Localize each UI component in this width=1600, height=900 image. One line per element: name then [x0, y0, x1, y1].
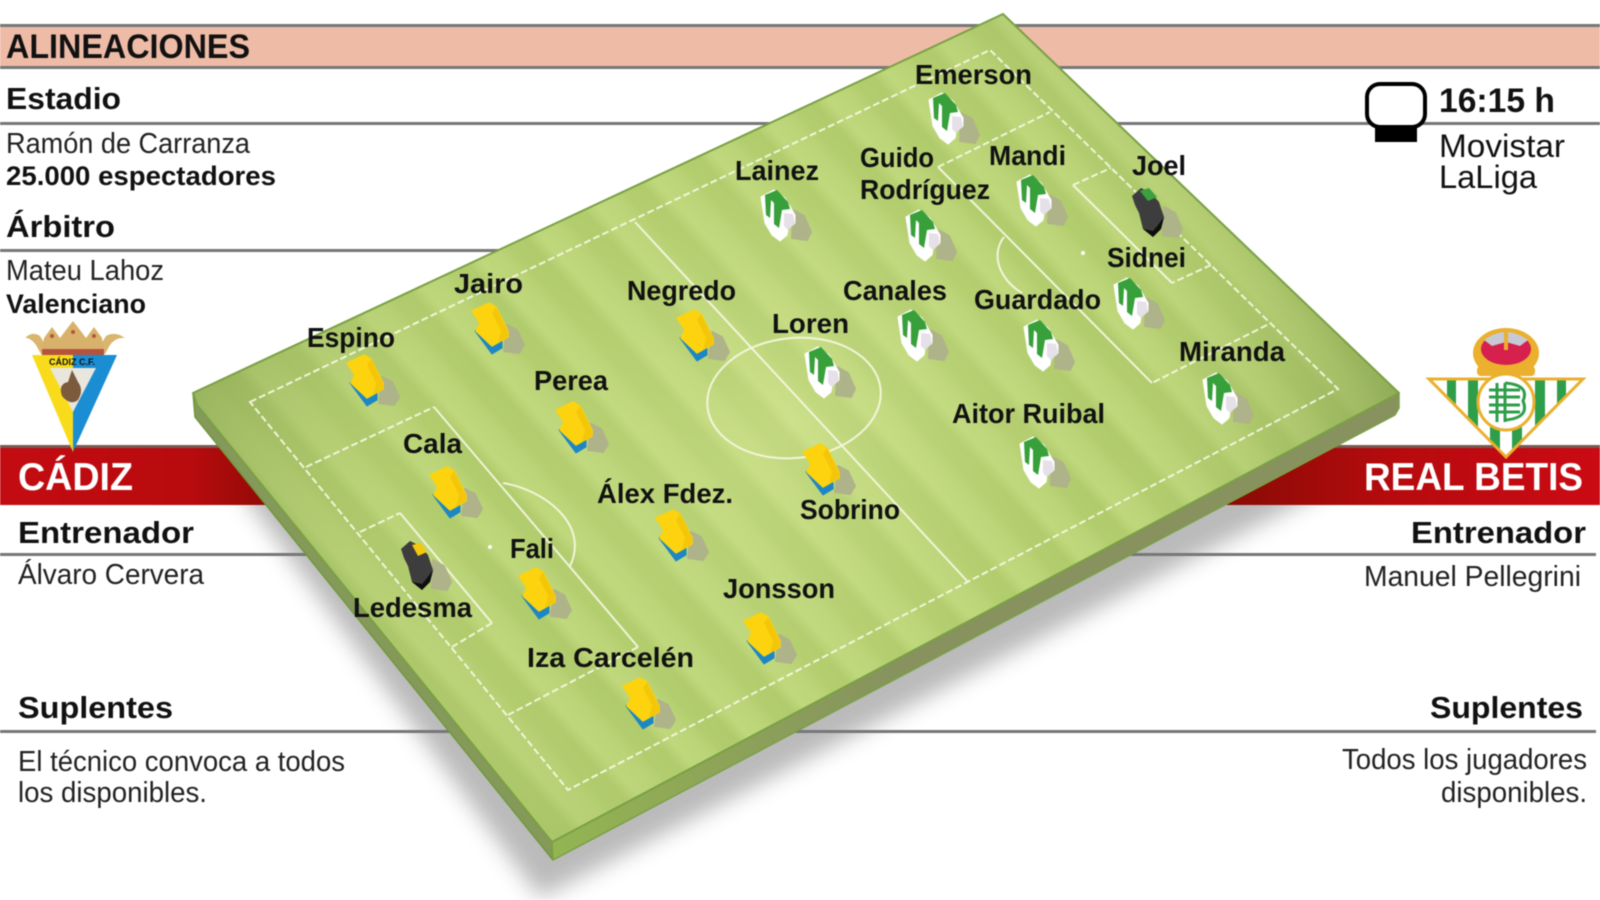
- player: Ledesma: [353, 541, 472, 623]
- player: Jairo: Jairo: [454, 268, 523, 299]
- panel: stadium and referee: Estadio: [6, 81, 121, 116]
- player: Lainez: [735, 155, 819, 241]
- player: Perea: [534, 365, 608, 453]
- player: Sidnei: [1107, 242, 1186, 329]
- player: Aitor Ruibal: [952, 398, 1105, 488]
- player: Aitor Ruibal: Aitor Ruibal: [952, 398, 1105, 429]
- rule: estadio: [0, 122, 1600, 125]
- player: Guardado: Guardado: [974, 284, 1101, 315]
- panel: betis notes: disponibles.: [1441, 777, 1587, 809]
- panel: broadcast: Movistar: [1439, 128, 1565, 164]
- panel: stadium and referee: Mateu Lahoz: [6, 255, 164, 287]
- player: Sidnei: Sidnei: [1107, 242, 1186, 273]
- player: Guido Rodriguez: Guido: [860, 142, 934, 173]
- panel: stadium and referee: 25.000 espectadores: [6, 161, 276, 191]
- panel: broadcast: LaLiga: [1439, 159, 1537, 195]
- icon: cadiz crest: [25, 321, 125, 452]
- player: Alex Fdez: [597, 478, 733, 561]
- pitch markings: [250, 50, 1338, 790]
- title band: [0, 24, 1600, 69]
- panel: cadiz notes: Álvaro Cervera: [18, 558, 205, 591]
- pitch shadow: [225, 300, 1345, 898]
- panel: cadiz notes: Entrenador: [18, 515, 194, 550]
- player: Negredo: [627, 275, 736, 361]
- icon: cadiz crest: CÁDIZ C.F.: [49, 357, 95, 367]
- player: Iza Carcelen: Iza Carcelén: [527, 642, 694, 673]
- panel: stadium and referee: [6, 81, 276, 319]
- icon: betis crest: [1429, 328, 1583, 459]
- player: Joel: [1132, 150, 1186, 237]
- rule: arbitro: [0, 249, 500, 252]
- panel: betis notes: Suplentes: [1430, 690, 1583, 725]
- player: Cala: Cala: [403, 428, 462, 459]
- player: Guardado: [974, 284, 1101, 371]
- player: Loren: [772, 308, 855, 398]
- player: Guido Rodriguez: Rodríguez: [860, 174, 990, 205]
- panel: cadiz notes: El técnico convoca a todos: [18, 746, 345, 778]
- panel: cadiz notes: los disponibles.: [18, 777, 207, 809]
- player: Emerson: Emerson: [915, 59, 1032, 90]
- panel: cadiz notes: Suplentes: [18, 690, 173, 725]
- panel: stadium and referee: Valenciano: [6, 289, 146, 319]
- player: Negredo: Negredo: [627, 275, 736, 306]
- player: Cala: [403, 428, 482, 518]
- title band: ALINEACIONES: [6, 28, 250, 66]
- panel: betis notes: Manuel Pellegrini: [1364, 561, 1581, 593]
- player: Fali: [510, 533, 571, 619]
- panel: betis notes: Todos los jugadores: [1342, 744, 1587, 776]
- player: Espino: [307, 322, 399, 406]
- player: Mandi: Mandi: [989, 140, 1066, 171]
- panel: betis notes: [1342, 515, 1587, 809]
- team band: [0, 445, 1600, 505]
- player: Joel: Joel: [1132, 150, 1186, 181]
- player: Emerson: [915, 59, 1032, 144]
- player: Canales: [843, 275, 948, 361]
- player: Loren: Loren: [772, 308, 849, 339]
- panel: broadcast: 16:15 h: [1439, 82, 1555, 120]
- pitch: [193, 14, 1399, 860]
- player: Sobrino: [800, 444, 900, 525]
- player: Lainez: Lainez: [735, 155, 819, 186]
- rule: entrenador: [0, 553, 1596, 556]
- player: Sobrino: Sobrino: [800, 494, 900, 525]
- player: Alex Fdez: Álex Fdez.: [597, 478, 733, 509]
- player: Miranda: [1179, 336, 1285, 424]
- player: Jonsson: Jonsson: [723, 573, 835, 604]
- player: Guido Rodriguez: [860, 142, 990, 261]
- player: Canales: Canales: [843, 275, 947, 306]
- panel: cadiz notes: [18, 515, 345, 809]
- team name: cadiz: CÁDIZ: [18, 455, 133, 499]
- player: Jairo: [454, 268, 524, 354]
- team name: betis: REAL BETIS: [1364, 456, 1583, 499]
- player: Miranda: Miranda: [1179, 336, 1285, 367]
- panel: broadcast: [1367, 82, 1565, 195]
- player: Jonsson: [723, 573, 835, 664]
- rule: suplentes: [0, 730, 1596, 733]
- player: Espino: Espino: [307, 322, 395, 353]
- player: Perea: Perea: [534, 365, 608, 396]
- icon: tv: [1367, 84, 1425, 142]
- player: Ledesma: Ledesma: [353, 592, 472, 623]
- panel: stadium and referee: Árbitro: [6, 209, 115, 244]
- panel: betis notes: Entrenador: [1411, 515, 1586, 550]
- player: Iza Carcelen: [527, 642, 694, 729]
- player: Fali: Fali: [510, 533, 554, 564]
- player: Mandi: [989, 140, 1067, 226]
- panel: stadium and referee: Ramón de Carranza: [6, 128, 251, 160]
